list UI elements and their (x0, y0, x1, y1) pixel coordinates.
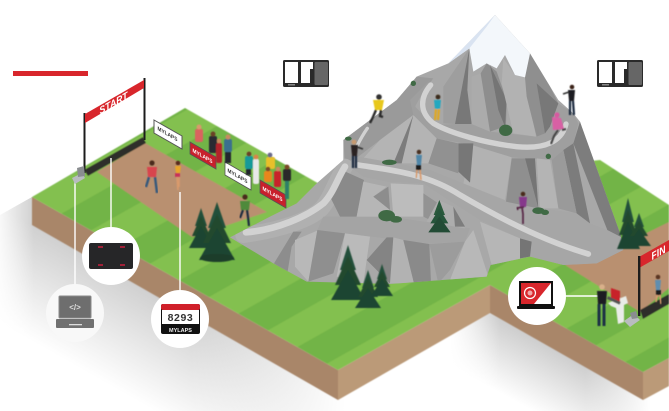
equipment case at finish (624, 311, 640, 327)
runner: red top (146, 160, 157, 193)
upper ledge (414, 94, 578, 160)
photographer: left ledge (351, 140, 363, 168)
finish gate: FIN (651, 244, 667, 263)
callout: laptop with code: </> (69, 303, 81, 312)
rock face under ridge (362, 115, 437, 163)
clipped mountain detail (243, 15, 623, 283)
middle ledge (350, 157, 623, 265)
equipment case at start (72, 166, 85, 184)
climber: purple top (517, 192, 527, 224)
pine trees: right group (617, 198, 651, 249)
sponsor boards along the track (154, 120, 286, 208)
snow cap (448, 15, 530, 77)
connector lines (75, 158, 600, 296)
red accent bar (13, 71, 88, 76)
photographer: top right (563, 85, 575, 115)
callout: timing mat (82, 227, 140, 285)
platform: soil and grass (32, 108, 669, 400)
right rock facets (393, 115, 622, 237)
pine trees: left group (189, 202, 235, 262)
spectators (195, 124, 291, 199)
runner: yellow top (175, 161, 181, 190)
callout: laptop with code (46, 284, 104, 342)
callout: race bib (151, 290, 209, 348)
climber: pink jacket (551, 112, 566, 144)
finish gate (638, 240, 669, 316)
pine tree on mountain (428, 200, 451, 232)
runner: green top (240, 194, 250, 226)
device icon: left (283, 60, 329, 87)
start gate (84, 78, 146, 173)
middle cliff facets (330, 170, 465, 228)
climber: blue vest (416, 150, 422, 180)
sponsor boards along the track: MYLAPS (262, 186, 283, 204)
callout: race bib: 8293 (168, 312, 193, 324)
mountain (230, 15, 623, 284)
upper rock facets (443, 48, 558, 137)
sponsor boards along the track: MYLAPS (158, 126, 178, 144)
ground shadow: left platform (0, 190, 345, 411)
sponsor boards along the track: MYLAPS (228, 168, 248, 186)
finish track (565, 222, 669, 312)
sponsor boards along the track: MYLAPS (192, 148, 213, 166)
start gate: START (99, 90, 129, 117)
ground shadow: right platform (345, 290, 669, 411)
lower ledge band (323, 216, 324, 218)
pine trees: front group (331, 245, 393, 308)
climber: teal top (434, 95, 441, 120)
timing mat: start (84, 137, 146, 176)
runner at finish (655, 275, 661, 304)
lower cliff facets (274, 222, 532, 283)
device icon: right (597, 60, 643, 87)
start track (97, 143, 267, 237)
lower left ledge (243, 167, 345, 235)
bushes on mountain (345, 81, 551, 223)
climber: yellow jacket (370, 94, 384, 123)
mountain silhouette (230, 15, 623, 284)
timekeeper at table (597, 284, 628, 326)
callout: timing laptop (508, 267, 566, 325)
timing mat: finish (640, 294, 669, 319)
trails (246, 85, 588, 254)
ridge band (343, 77, 433, 163)
callout: race bib: MYLAPS (169, 328, 192, 334)
